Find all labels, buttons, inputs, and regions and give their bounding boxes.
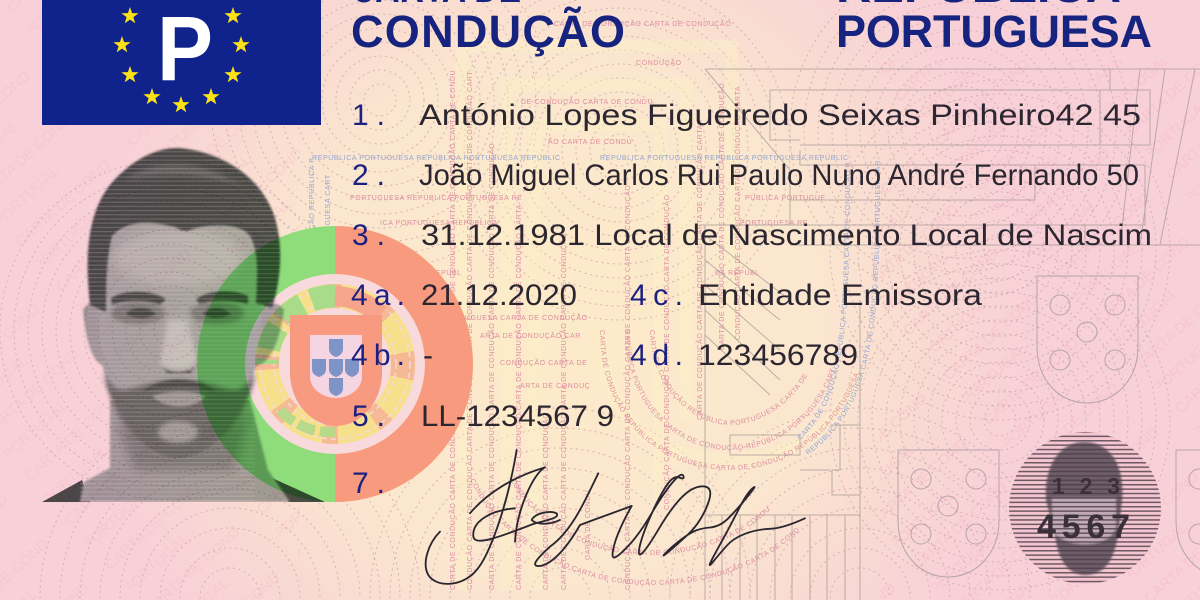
flag: green half [197, 226, 335, 502]
lips [152, 392, 206, 406]
maze of microtext: PORTUGUESA RE [740, 220, 807, 225]
title: Carta de Condução: CONDUÇÃO [351, 6, 625, 57]
maze of microtext: DA REPÚBL [716, 268, 759, 275]
field 4d: document number: 4d. [630, 339, 683, 372]
eyes [126, 308, 231, 318]
blue microtext border [308, 154, 880, 454]
field 4b: expiry date [351, 339, 433, 372]
scan lines [80, 148, 285, 502]
forehead highlight [114, 230, 242, 286]
field 2: given names: João Miguel Carlos Rui Paulo Nuno André Fernando 50 [419, 159, 1139, 192]
maze of microtext: PORTUGUESA REPÚBLICA PORTUGUESA RE [350, 194, 522, 200]
maze of microtext: DE CONDUÇÃO CARTA DE CONDU [522, 98, 652, 106]
white shield [310, 335, 362, 398]
portrait photo [42, 148, 325, 502]
field 4c: issuing authority: 4c. [630, 279, 683, 312]
hair top highlight [129, 164, 234, 184]
maze of microtext: ARTA DE CONDUÇÃO CAR [480, 332, 580, 340]
red shield border [290, 315, 382, 426]
EU band [42, 0, 321, 125]
flag: red half [335, 226, 473, 502]
beard [103, 372, 256, 460]
maze of microtext: CONDUÇÃO CARTA DE [500, 358, 586, 366]
field 3: birth date and place: 3. [352, 219, 385, 252]
ghost portrait [1009, 432, 1161, 584]
security watermark left [0, 0, 300, 600]
maze of microtext: CARTA DE CONDUÇÃO CARTA DE CONDUÇÃO [542, 415, 550, 590]
maze of microtext: CONDUÇÃO [636, 58, 681, 66]
field 4b: expiry date: 4b. [351, 339, 405, 372]
architectural line drawing [700, 69, 1200, 600]
maze of microtext: CARTA DE CONDU [585, 490, 590, 560]
field 3: birth date and place: 31.12.1981 Local de Nascimento Local de Nascim [421, 219, 1152, 252]
blue microtext border: CARTA DE CONDUÇÃO REPÚBLICA PORTUGUESA [308, 158, 316, 228]
maze of microtext: CONDUÇÃO CARTA DE CONDUÇÃO CARTA DE CONDUÇÃO CARTA DE CONDUÇÃO CARTA DE CONDUÇÃO [624, 186, 632, 590]
blue microtext border: REPÚBLICA PORTUGUESA CARTA DE CONDUÇÃO [325, 175, 330, 225]
ghost circle background [1009, 432, 1161, 584]
maze of microtext [350, 20, 859, 590]
field 4d: document number: 123456789 [698, 339, 858, 372]
field 4b: expiry date: - [423, 339, 433, 372]
handwritten signature [426, 450, 805, 584]
maze of microtext: CONDUÇÃO CARTA DE CONDUÇÃO CARTA DE CONDUÇÃO CARTA DE CONDUÇÃO CARTA DE CONDUÇÃO [470, 478, 798, 586]
shirt [42, 478, 325, 502]
maze of microtext: PÚBLICA PORTUGUE [746, 194, 825, 200]
field 4c: issuing authority: Entidade Emissora [698, 279, 982, 312]
maze of microtext: CARTA DE CONDUÇÃO CARTA DE CONDUÇÃO CARTA DE CONDUÇÃO CARTA DE CONDUÇÃO CARTA DE CONDUÇÃO [488, 144, 496, 590]
maze of microtext: CARTA DE CONDUÇÃO CARTA DE CONDUÇÃO CARTA DE CONDUÇÃO CARTA DE CONDUÇÃO [560, 234, 568, 590]
maze of microtext: CARTA DE CONDUÇÃO CARTA DE CONDUÇÃO CARTA DE CONDUÇÃO [718, 84, 726, 350]
maze of microtext: CARTA DE CONDUÇÃO CARTA DE CONDUÇÃO CARTA DE CONDUÇÃO CARTA DE CONDUÇÃO CARTA [514, 204, 522, 590]
blue microtext border: CARTA DE CONDUÇÃO REPÚBLICA PORTUGUESA CARTA DE CONDUÇÃO REPÚBLICA PORTUGUESA [798, 162, 851, 439]
maze of microtext: REPÚBL [436, 268, 461, 275]
maze of microtext: CARTA DE CONDUÇÃO REPÚBLICA PORTUGUESA CARTA DE CONDUÇÃO [650, 330, 808, 425]
maze of microtext: CONDUÇÃO CARTA DE CONDUÇÃO CARTA DE CONDUÇÃO CARTA DE CONDUÇÃO CARTA DE CONDUÇÃO CARTA DE CONDUÇÃO CARTA [466, 72, 474, 590]
maze of microtext: REPÚBLICA PORTUGUESA CARTA DE CONDUÇÃO REPÚBLICA PORTUGUESA CARTA DE CONDUÇÃO [625, 330, 834, 452]
five blue quinas [312, 339, 359, 396]
maze of microtext: CONDUÇÃO CARTA DE CONDUÇÃO CARTA DE CONDUÇÃO CARTA [734, 86, 742, 340]
country code: P [157, 0, 213, 100]
maze of microtext: CONDUÇÃO CARTA DE CONDUÇÃO CARTA DE CONDUÇÃO CARTA DE CONDUÇÃO [511, 478, 770, 555]
field 5: licence number: 5. [352, 400, 385, 433]
neck shadow [115, 410, 250, 470]
maze of microtext: CONDUÇÃO CARTA DE CONDUÇÃO CARTA DE CONDUÇÃO CARTA DE CONDUÇÃO [662, 195, 670, 510]
maze of microtext: CARTA DE CONDUÇÃO REPÚBLICA PORTUGUESA CARTA DE CONDUÇÃO REPÚBLICA PORTUGUESA CARTA DE CONDUÇÃO [600, 330, 859, 470]
maze of microtext: ÃO CARTA DE CONDU [548, 138, 632, 144]
field 7: signature label: 7. [352, 467, 385, 500]
armillary sphere [245, 274, 425, 454]
ears [83, 303, 284, 366]
face skin [97, 215, 262, 460]
ghost stripes [1009, 432, 1161, 584]
hair [88, 148, 280, 312]
nose [160, 320, 197, 370]
ghost digits: 123 [1052, 473, 1120, 499]
cream maze bands [463, 46, 860, 590]
field 4d: document number [630, 339, 858, 372]
maze of microtext: CARTA DE CONDUÇÃO CARTA DE CONDUÇÃO CARTA DE CONDUÇÃO CARTA [696, 125, 704, 420]
title: República Portuguesa: PORTUGUESA [836, 6, 1152, 57]
field 4a: issue date [351, 279, 577, 312]
ghost portrait: 4567 [1037, 508, 1130, 546]
maze of microtext: CARTA DE CONDUÇÃO CARTA DE CONDUÇÃO CARTA DE CONDUÇÃO CARTA DE CONDUÇÃO CARTA DE CONDUÇÃO CARTA DE CONDUÇÃO [448, 71, 456, 590]
EU stars [113, 0, 250, 112]
maze of microtext: ICA PORTUGUESA REPÚBLICA [380, 218, 498, 225]
ghost head [1046, 442, 1122, 575]
field 4a: issue date: 4a. [351, 279, 405, 312]
Portuguese flag circle [197, 226, 473, 502]
maze of microtext: ARTA DE CONDUÇ [520, 383, 590, 390]
field 4a: issue date: 21.12.2020 [421, 279, 577, 312]
blue microtext border: REPÚBLICA PORTUGUESA CARTA DE CONDUÇÃO REPÚBLICA PORTUGUESA CARTA DE CONDUÇÃO [806, 161, 880, 454]
beard highlight [158, 421, 198, 443]
security watermark right [880, 60, 1200, 600]
field 1: surname: 1. [352, 99, 385, 132]
maze of microtext: TUGUESA CARTA DE CONDUÇÃO [464, 314, 587, 322]
shoulders and neck [80, 400, 290, 502]
field 2: given names: 2. [352, 159, 385, 192]
field 1: surname: António Lopes Figueiredo Seixas Pinheiro42 45 [419, 99, 1141, 132]
field 5: licence number: LL-1234567 9 [421, 400, 614, 433]
eye sockets [111, 302, 165, 324]
eyebrows [111, 291, 248, 305]
coat of arms shields [898, 276, 1200, 577]
moustache [142, 380, 216, 392]
